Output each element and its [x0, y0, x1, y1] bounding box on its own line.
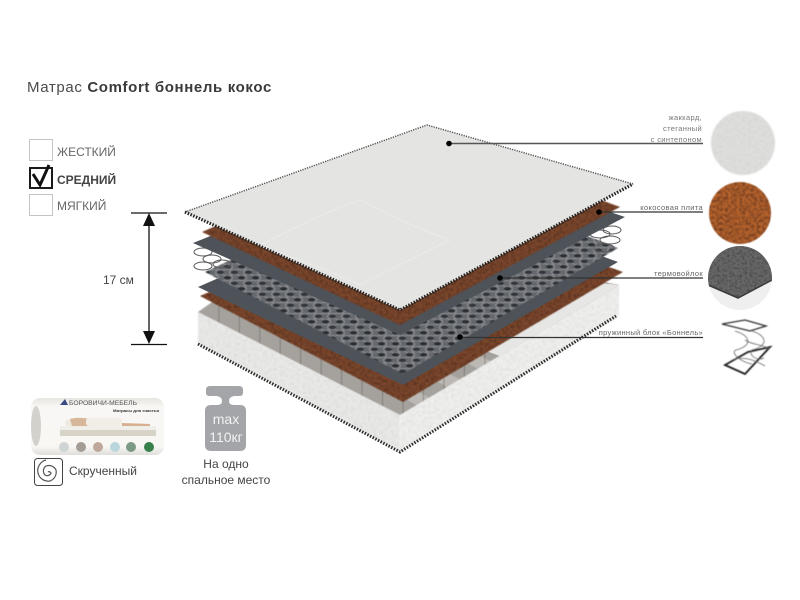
caption: per sleeping place: [182, 457, 271, 487]
label: coconut: кокосовая плита: [640, 203, 703, 212]
mattress exploded view: [185, 125, 633, 452]
label: springs: пружинный блок «Боннель»: [599, 328, 703, 337]
leader: coconut: [596, 209, 703, 215]
option: hard: ЖЕСТКИЙ: [57, 144, 116, 159]
label: jacquard: [651, 113, 702, 144]
icon: weight limit: 110кг: [209, 429, 243, 445]
height value: 17 см: [103, 273, 134, 287]
bonnell spring block: [194, 170, 621, 374]
infographic canvas: [28, 81, 776, 486]
top quilted jacquard layer: [185, 125, 633, 310]
swatch: felt: [708, 246, 772, 310]
leader: jacquard: [446, 141, 703, 146]
leader: springs: [457, 334, 703, 340]
label: rolled: Скрученный: [69, 464, 137, 478]
brand: БОРОВИЧИ-МЕБЕЛЬ: [69, 400, 137, 407]
feature dots: [59, 442, 154, 452]
swatch: bonnell spring: [722, 320, 770, 374]
icon: rolled spiral: [34, 458, 62, 486]
label: jacquard: с синтепоном: [651, 135, 702, 144]
rolled mattress: [31, 398, 164, 455]
option: medium, checked: СРЕДНИЙ: [57, 172, 116, 187]
icon: weight limit: max: [213, 411, 239, 427]
brand: [60, 399, 160, 413]
height dimension: [103, 213, 167, 344]
base block: [198, 250, 619, 452]
roll end: [31, 406, 41, 446]
thermal felt lower: [198, 190, 618, 385]
label: jacquard: стеганный: [663, 124, 702, 133]
label: jacquard: жаккард,: [669, 113, 702, 122]
brand: Матрасы для счастья: [113, 408, 160, 413]
sleeping figure on mattress: [60, 418, 156, 436]
icon: weight limit: [205, 386, 246, 451]
caption: per sleeping place: На одно: [203, 457, 249, 471]
caption: per sleeping place: спальное место: [182, 473, 271, 487]
firmness selector: [30, 140, 116, 216]
swatch: jacquard: [711, 111, 775, 175]
coconut slab lower: [200, 200, 623, 402]
coconut slab upper: [202, 135, 620, 325]
label: felt: термовойлок: [654, 269, 703, 278]
leader: felt: [497, 275, 703, 281]
thermal felt upper: [193, 150, 625, 335]
swatch: coconut: [709, 182, 771, 244]
title: Матрас Comfort боннель кокос: [27, 79, 272, 96]
option: soft: МЯГКИЙ: [57, 198, 106, 213]
